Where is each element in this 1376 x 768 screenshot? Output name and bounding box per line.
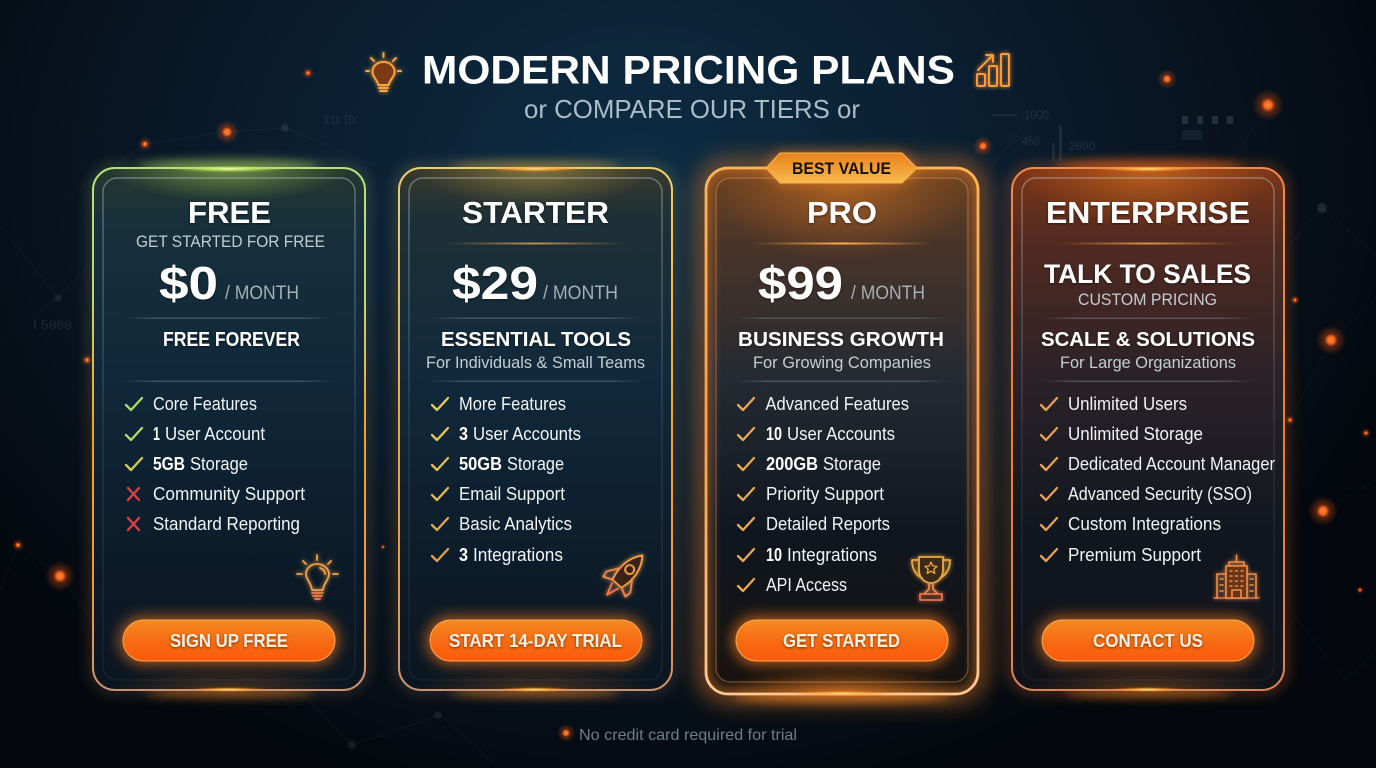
button: start trial xyxy=(426,616,646,665)
feature list: Storage xyxy=(190,453,248,474)
feature list: Email Support xyxy=(459,483,565,504)
audience: For Individuals & Small Teams xyxy=(426,353,645,372)
feature list: Detailed Reports xyxy=(766,513,890,534)
talk to sales: TALK TO SALES xyxy=(1044,259,1251,289)
feature list: Integrations xyxy=(787,544,877,565)
feature list: Storage xyxy=(507,453,564,474)
price: $29 xyxy=(452,257,538,309)
icon: rocket xyxy=(595,545,654,606)
feature list: Standard Reporting xyxy=(153,513,300,534)
price: / MONTH xyxy=(543,283,618,304)
feature list: 5GB xyxy=(153,453,185,474)
plan name: ENTERPRISE xyxy=(1046,195,1250,230)
button: start trial: START 14-DAY TRIAL xyxy=(449,631,622,651)
feature list: 50GB xyxy=(459,453,502,474)
background: 1000 xyxy=(1024,108,1049,122)
feature list: User Accounts xyxy=(473,423,581,444)
feature list: Integrations xyxy=(473,544,563,565)
panel: FREE plan xyxy=(93,134,365,712)
feature list: Advanced Security (SSO) xyxy=(1068,483,1252,504)
plan name: PRO xyxy=(807,195,877,230)
feature list xyxy=(432,393,581,565)
feature list: Custom Integrations xyxy=(1068,513,1221,534)
panel: STARTER plan xyxy=(399,128,672,712)
icon: title light bulb xyxy=(366,53,401,91)
plan group heading: FREE FOREVER xyxy=(163,328,300,351)
feature list: Unlimited Users xyxy=(1068,393,1187,414)
price: / MONTH xyxy=(225,283,299,304)
feature list: API Access xyxy=(766,574,847,595)
feature list: User Accounts xyxy=(787,423,895,444)
plan group heading: BUSINESS GROWTH xyxy=(738,328,944,351)
plan group heading: SCALE & SOLUTIONS xyxy=(1041,328,1255,351)
button: sign up free: SIGN UP FREE xyxy=(170,631,288,651)
panel: PRO plan xyxy=(706,120,978,720)
subtitle: or COMPARE OUR TIERS or xyxy=(524,94,860,124)
feature list xyxy=(738,393,909,595)
plan name: FREE xyxy=(188,195,271,230)
feature list: Dedicated Account Manager xyxy=(1068,453,1275,474)
badge: best value: BEST VALUE xyxy=(792,159,891,178)
button: contact us: CONTACT US xyxy=(1093,631,1203,651)
icon: light bulb xyxy=(297,555,338,599)
button: get started: GET STARTED xyxy=(783,631,900,651)
talk to sales: CUSTOM PRICING xyxy=(1078,290,1217,309)
title: MODERN PRICING PLANS xyxy=(422,48,955,92)
audience: For Growing Companies xyxy=(753,353,931,372)
tagline: GET STARTED FOR FREE xyxy=(136,232,325,251)
audience: For Large Organizations xyxy=(1060,353,1236,372)
background: 450 xyxy=(1022,134,1040,148)
icon: office building xyxy=(1214,555,1259,598)
price xyxy=(758,257,925,309)
feature list: User Account xyxy=(165,423,265,444)
button: get started xyxy=(732,616,952,665)
footnote: No credit card required for trial xyxy=(579,727,797,744)
feature list: Storage xyxy=(823,453,881,474)
badge: best value xyxy=(766,153,917,183)
icon: title bar chart xyxy=(977,54,1009,86)
feature list: Basic Analytics xyxy=(459,513,572,534)
price: / MONTH xyxy=(851,283,925,304)
plan name: STARTER xyxy=(462,195,609,230)
feature list: Advanced Features xyxy=(766,393,909,414)
button: sign up free xyxy=(119,616,339,665)
feature list xyxy=(1041,393,1275,565)
price: $99 xyxy=(758,257,843,309)
feature list: 200GB xyxy=(766,453,818,474)
background: 2600 xyxy=(1069,139,1095,153)
background: 3:11 TD xyxy=(323,113,355,127)
price xyxy=(159,257,299,309)
icon: trophy xyxy=(912,557,950,600)
feature list: Community Support xyxy=(153,483,305,504)
feature list: 3 xyxy=(459,423,468,444)
panel: ENTERPRISE plan xyxy=(1012,117,1284,712)
talk to sales xyxy=(1044,259,1251,309)
plan group heading: ESSENTIAL TOOLS xyxy=(441,328,631,351)
button: contact us xyxy=(1038,616,1258,665)
feature list: 3 xyxy=(459,544,468,565)
feature list: Core Features xyxy=(153,393,257,414)
price xyxy=(452,257,618,309)
feature list: 10 xyxy=(766,423,782,444)
feature list: 1 xyxy=(153,423,160,444)
price: $0 xyxy=(159,257,218,309)
feature list: Premium Support xyxy=(1068,544,1201,565)
feature list: More Features xyxy=(459,393,566,414)
feature list: Priority Support xyxy=(766,483,884,504)
feature list: Unlimited Storage xyxy=(1068,423,1203,444)
feature list: 10 xyxy=(766,544,782,565)
feature list xyxy=(126,393,305,534)
background: I 5868 xyxy=(33,318,72,332)
